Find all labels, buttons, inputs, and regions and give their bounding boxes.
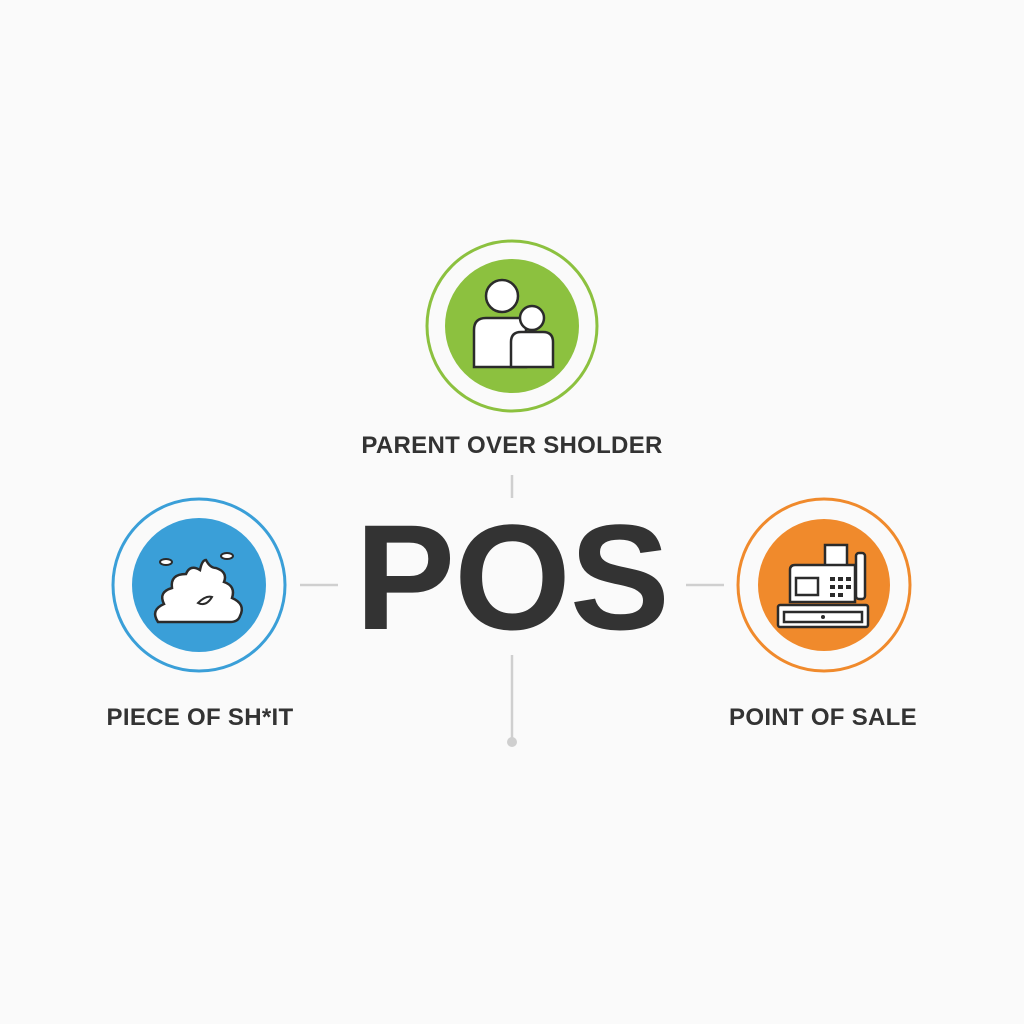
title: POS: POS: [355, 493, 669, 661]
icon: poop: [113, 499, 285, 671]
label: piece of sh*it: PIECE OF SH*IT: [107, 704, 293, 731]
label: point of sale: POINT OF SALE: [729, 704, 917, 731]
label: parent over sholder: PARENT OVER SHOLDER: [361, 432, 663, 459]
icon: cash register: [738, 499, 910, 671]
